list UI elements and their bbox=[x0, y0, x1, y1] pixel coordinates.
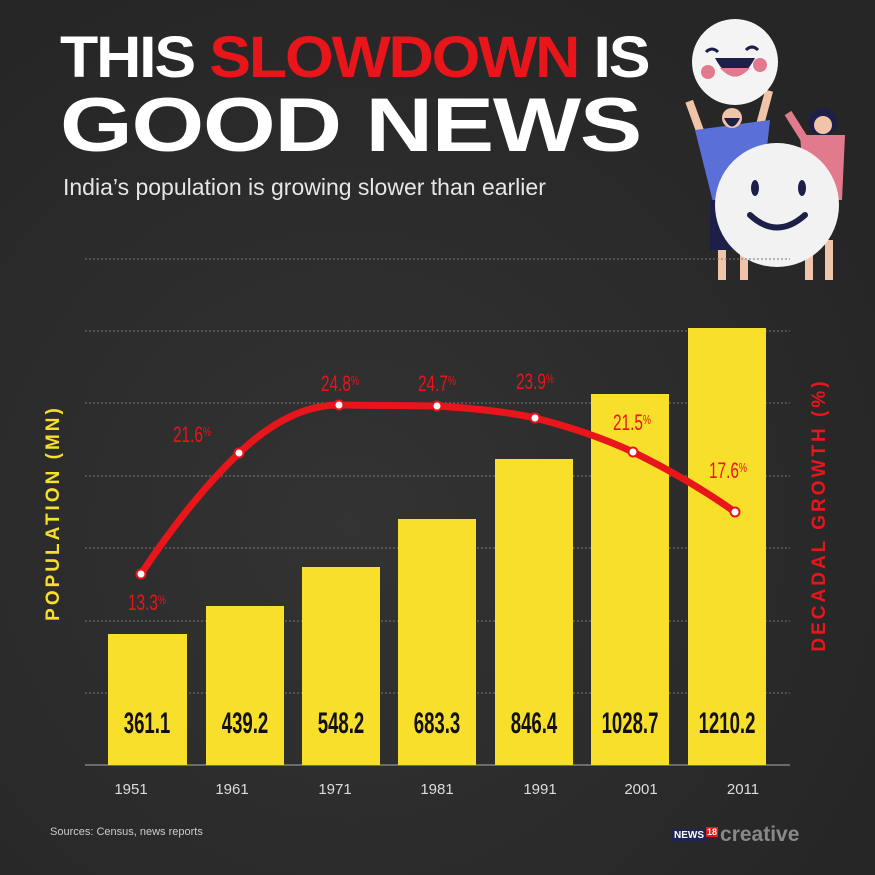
title bbox=[60, 25, 648, 168]
logo: 18 bbox=[707, 827, 717, 837]
growth labels: % bbox=[351, 375, 359, 388]
growth labels: 23.9 bbox=[516, 370, 546, 395]
illustration: people holding smiley faces bbox=[685, 19, 845, 280]
y axis label: population: POPULATION (MN) bbox=[43, 405, 64, 621]
bar values: 361.1 bbox=[124, 707, 170, 740]
bar values: 1210.2 bbox=[699, 707, 755, 740]
title: GOOD NEWS bbox=[60, 83, 641, 168]
title: THIS SLOWDOWN IS bbox=[60, 25, 648, 90]
bars bbox=[108, 328, 766, 765]
growth labels: 21.6 bbox=[173, 423, 203, 448]
year labels: 2011 bbox=[727, 781, 759, 798]
bar values: 548.2 bbox=[318, 707, 364, 740]
year labels bbox=[114, 781, 759, 798]
year labels: 1961 bbox=[215, 781, 249, 798]
year labels: 1951 bbox=[114, 781, 148, 798]
logo bbox=[672, 823, 799, 846]
logo: NEWS bbox=[674, 830, 704, 840]
growth labels: 24.7 bbox=[418, 372, 448, 397]
growth labels: 21.5 bbox=[613, 411, 643, 436]
bar values: 1028.7 bbox=[602, 707, 658, 740]
growth labels: 17.6 bbox=[709, 459, 739, 484]
growth labels: % bbox=[739, 462, 747, 475]
growth labels: 13.3 bbox=[128, 591, 158, 616]
growth labels bbox=[128, 370, 747, 616]
growth labels: % bbox=[203, 426, 211, 439]
growth labels: % bbox=[643, 414, 651, 427]
source: Sources: Census, news reports bbox=[50, 826, 203, 838]
growth labels: % bbox=[158, 594, 166, 607]
year labels: 1971 bbox=[318, 781, 352, 798]
growth labels: % bbox=[448, 375, 456, 388]
bar values: 439.2 bbox=[222, 707, 268, 740]
subtitle: India’s population is growing slower than earlier bbox=[63, 174, 546, 200]
growth line bbox=[136, 400, 740, 578]
bar values: 683.3 bbox=[414, 707, 460, 740]
y axis label: decadal growth: DECADAL GROWTH (%) bbox=[809, 378, 830, 652]
logo: creative bbox=[720, 823, 799, 846]
year labels: 1991 bbox=[523, 781, 557, 798]
year labels: 1981 bbox=[420, 781, 454, 798]
bar values: 846.4 bbox=[511, 707, 557, 740]
growth labels: 24.8 bbox=[321, 372, 351, 397]
year labels: 2001 bbox=[624, 781, 658, 798]
growth labels: % bbox=[546, 373, 554, 386]
bar values bbox=[124, 707, 755, 740]
